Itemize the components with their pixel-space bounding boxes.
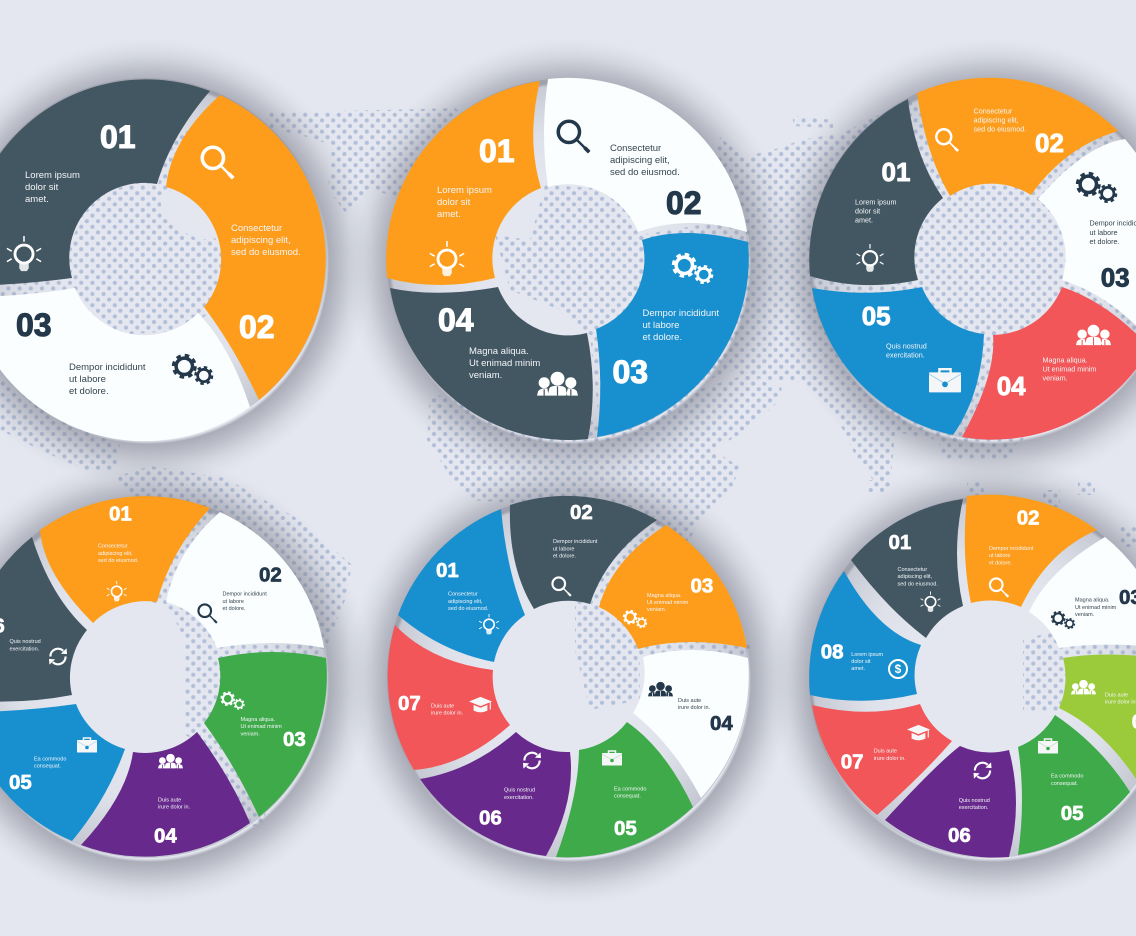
text: adipiscing elit,: [98, 551, 133, 557]
icon: gears: [624, 611, 647, 628]
text: Dempor incididunt: [642, 308, 719, 319]
text: consequat.: [34, 764, 61, 770]
wheel 1: three segments: [0, 38, 373, 488]
icon: briefcase: [77, 738, 97, 752]
text: Duis aute: [431, 703, 454, 709]
text: Quis nostrud: [959, 798, 990, 804]
icon: refresh: [973, 762, 992, 779]
number 05: 05: [1061, 802, 1084, 825]
text: amet.: [25, 194, 49, 205]
icon: briefcase: [1038, 739, 1058, 754]
icon: graduation cap: [469, 697, 492, 712]
icon: magnifier: [198, 604, 217, 623]
text: Lorem ipsum: [855, 197, 897, 206]
text: et dolore.: [69, 386, 109, 397]
icon: briefcase: [602, 751, 622, 766]
wheel 5: seven segments: [345, 456, 795, 906]
number 02: 02: [1017, 507, 1040, 530]
text: Dempor incididunt: [222, 592, 267, 598]
icon: refresh: [49, 648, 67, 665]
text: dolor sit: [855, 206, 880, 215]
text: amet.: [851, 666, 866, 672]
text: ut labore: [642, 320, 679, 331]
text: adipiscing elit,: [974, 115, 1019, 124]
text: adipiscing elit,: [231, 235, 291, 246]
text: Consectetur: [898, 567, 927, 573]
segment 07 red: [812, 704, 952, 815]
text: et dolore.: [553, 554, 576, 560]
text: et dolore.: [989, 560, 1012, 566]
text: Magna aliqua.: [647, 593, 682, 599]
text: et dolore.: [222, 606, 246, 612]
text: consequat.: [1051, 781, 1078, 787]
number 02: 02: [666, 185, 702, 221]
number 04: 04: [154, 824, 177, 847]
wheel 3: five segments: [767, 38, 1136, 488]
text: veniam.: [469, 370, 502, 381]
text: et dolore.: [642, 332, 682, 343]
text: Dempor incididunt: [69, 362, 146, 373]
text: consequat.: [614, 794, 641, 800]
text: sed do eiusmod.: [898, 581, 938, 587]
number 02: 02: [239, 309, 275, 345]
number 01: 01: [479, 133, 515, 169]
number 02: 02: [259, 564, 282, 587]
text: veniam.: [647, 607, 667, 613]
text: Magna aliqua.: [1075, 598, 1110, 604]
number 03: 03: [690, 575, 713, 598]
segment 01 dark: [809, 99, 943, 285]
segment 04 dark: [390, 287, 593, 440]
text: Magna aliqua.: [240, 717, 275, 723]
text: Duis aute: [158, 797, 181, 803]
text: adipiscing elit,: [610, 155, 670, 166]
number 01: 01: [109, 503, 132, 526]
text: Ea commodo: [34, 757, 66, 763]
number 01: 01: [436, 559, 459, 582]
number 03: 03: [612, 354, 648, 390]
text: sed do eiusmod.: [98, 558, 139, 564]
text: Ut enimad minim: [240, 724, 282, 730]
segment 05 blue: [0, 704, 125, 841]
text: veniam.: [1075, 612, 1095, 618]
number 02: 02: [570, 501, 593, 524]
icon: people: [1071, 680, 1096, 694]
text: irure dolor in.: [158, 804, 191, 810]
text: adipiscing elit,: [898, 574, 933, 580]
text: ut labore: [222, 599, 244, 605]
wheel 6: eight segments: [767, 456, 1136, 906]
icon: briefcase: [929, 369, 961, 392]
text: sed do eiusmod.: [610, 167, 680, 178]
icon: people: [648, 682, 673, 696]
text: Consectetur: [610, 143, 661, 154]
segment 02 white: [166, 512, 324, 648]
segment 02 white: [544, 78, 747, 232]
number 04: 04: [438, 302, 474, 338]
wheel 2: four segments: [345, 38, 795, 488]
text: Consectetur: [231, 223, 282, 234]
text: Quis nostrud: [10, 639, 41, 645]
text: Duis aute: [874, 749, 897, 755]
text: Consectetur: [98, 544, 128, 550]
icon: gears: [221, 692, 244, 709]
number 08: 08: [821, 640, 844, 663]
segment 06 dark: [0, 537, 87, 702]
icon: graduation cap: [907, 725, 930, 740]
icon: magnifier: [990, 578, 1008, 597]
segment 02 orange: [965, 495, 1097, 607]
icon: gears: [673, 254, 712, 283]
segment 03 white: [1029, 537, 1136, 650]
segment 06 purple: [420, 732, 571, 856]
icon: gears: [173, 355, 212, 384]
segment 04 lime: [1059, 654, 1136, 785]
text: amet.: [437, 209, 461, 220]
segment 04 white: [633, 650, 749, 798]
number 06: 06: [479, 806, 502, 829]
icon: light bulb: [479, 614, 499, 634]
text: adipiscing elit,: [448, 599, 483, 605]
text: Lorem ipsum: [851, 652, 883, 658]
wheel 4: six segments: [0, 456, 373, 906]
icon: light bulb: [921, 592, 940, 612]
icon: gears: [1077, 173, 1116, 202]
number 05: 05: [9, 771, 32, 794]
segment 07 red: [388, 625, 510, 770]
text: irure dolor in.: [431, 710, 464, 716]
text: Ut enimad minim: [1042, 364, 1096, 374]
icon: light bulb: [7, 236, 41, 271]
segment 04 red: [962, 287, 1136, 440]
segment 03 orange: [599, 525, 747, 649]
segment 05 green: [1018, 715, 1130, 855]
segment 01 dark: [0, 79, 210, 286]
text: irure dolor in.: [874, 756, 906, 762]
text: Duis aute: [1105, 693, 1128, 699]
number 06: 06: [948, 824, 971, 847]
text: Dempor incididunt: [553, 539, 597, 545]
text: sed do eiusmod.: [974, 124, 1026, 134]
segment 08 blue: [809, 571, 921, 701]
icon: people: [158, 754, 183, 768]
segment 02 orange: [166, 95, 326, 400]
number 04: 04: [997, 371, 1026, 401]
icon: light bulb: [856, 244, 884, 272]
segment 01 dark: [851, 499, 963, 638]
number 03: 03: [16, 307, 52, 343]
number 02: 02: [1035, 128, 1064, 158]
segment 05 blue: [812, 287, 984, 435]
text: Ea commodo: [614, 787, 646, 793]
text: et dolore.: [1090, 237, 1119, 246]
text: Ut enimad minim: [469, 358, 540, 369]
text: amet.: [855, 216, 873, 224]
segment 01 orange: [40, 496, 210, 623]
text: dolor sit: [25, 182, 59, 193]
text: Quis nostrud: [504, 788, 535, 794]
text: veniam.: [240, 731, 260, 737]
text: Quis nostrud: [886, 341, 927, 350]
icon: light bulb: [430, 241, 464, 276]
text: Consectetur: [974, 106, 1012, 115]
segment 04 purple: [81, 732, 250, 857]
segment 03 blue: [596, 233, 749, 437]
text: ut labore: [553, 546, 574, 552]
text: Lorem ipsum: [437, 185, 492, 196]
text: exercitation.: [886, 351, 925, 360]
number 07: 07: [398, 692, 421, 715]
text: irure dolor in.: [678, 705, 711, 711]
number 05: 05: [862, 301, 891, 331]
icon: people: [1076, 325, 1111, 345]
text: dolor sit: [851, 659, 871, 665]
text: Ut enimad minim: [647, 600, 689, 606]
icon: magnifier: [202, 147, 233, 178]
text: veniam.: [1042, 374, 1068, 383]
text: dolor sit: [437, 197, 471, 208]
number 07: 07: [841, 750, 864, 773]
icon: refresh: [523, 752, 541, 769]
text: Consectetur: [448, 592, 478, 598]
icon: magnifier: [552, 577, 571, 596]
icon: magnifier: [936, 129, 958, 151]
text: exercitation.: [10, 646, 40, 652]
segment 03 green: [204, 652, 327, 817]
text: Ut enimad minim: [1075, 605, 1117, 611]
segment 03 white: [0, 288, 250, 441]
text: ut labore: [989, 553, 1010, 559]
text: ut labore: [69, 374, 106, 385]
world map halftone: [0, 100, 1136, 827]
text: Ea commodo: [1051, 774, 1083, 780]
number 03: 03: [283, 728, 306, 751]
number 05: 05: [614, 817, 637, 840]
number 01: 01: [100, 119, 136, 155]
text: ut labore: [1090, 228, 1117, 237]
text: Dempor incididunt: [989, 546, 1033, 552]
icon: gears: [1052, 612, 1075, 629]
icon: light bulb: [107, 581, 127, 601]
icon: people: [537, 372, 578, 396]
number 03: 03: [1101, 263, 1130, 293]
number 01: 01: [888, 531, 911, 554]
icon: dollar: $: [895, 662, 902, 676]
text: exercitation.: [959, 805, 989, 811]
text: Lorem ipsum: [25, 170, 80, 181]
segment 05 green: [556, 722, 693, 857]
segment 03 white: [1038, 139, 1136, 340]
text: Magna aliqua.: [469, 346, 529, 357]
segment 02 dark: [510, 496, 657, 609]
segment 02 orange: [917, 78, 1118, 196]
number 04: 04: [710, 712, 733, 735]
text: Duis aute: [678, 698, 701, 704]
text: Magna aliqua.: [1042, 355, 1088, 364]
segment 06 purple: [885, 746, 1016, 858]
segment 01 orange: [386, 81, 541, 285]
text: exercitation.: [504, 795, 534, 801]
text: sed do eiusmod.: [231, 247, 301, 258]
number 01: 01: [882, 157, 910, 187]
text: sed do eiusmod.: [448, 606, 489, 612]
icon: magnifier: [558, 121, 589, 152]
segment 01 blue: [398, 509, 525, 662]
